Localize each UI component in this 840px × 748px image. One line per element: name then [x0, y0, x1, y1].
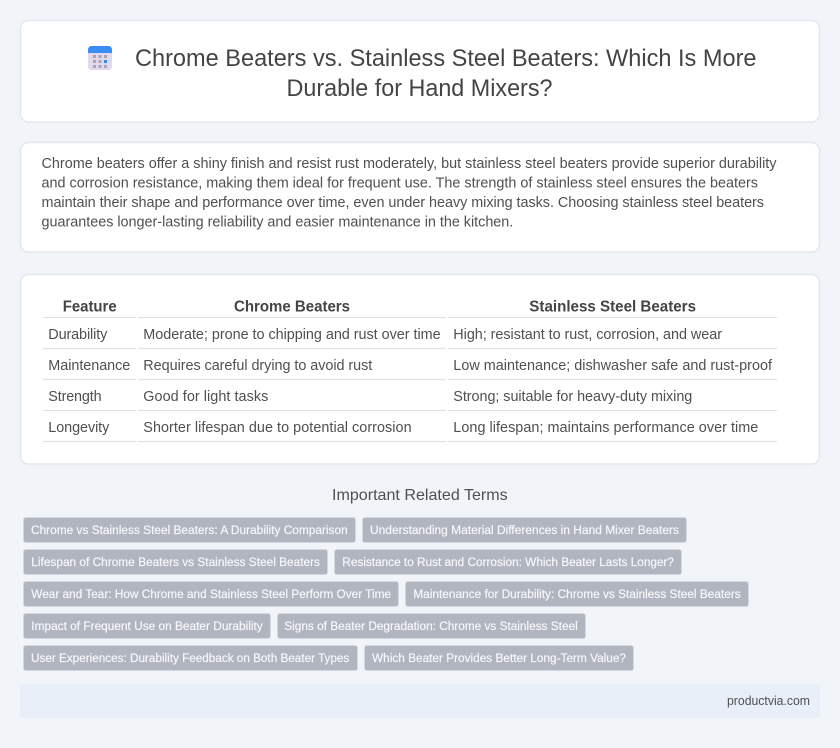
- row: durability: Durability: [48, 327, 108, 343]
- tag row 3: [24, 582, 748, 606]
- row: maintenance: Requires careful drying to avoid rust: [143, 358, 372, 374]
- table header: Chrome Beaters: [234, 298, 350, 316]
- tag row 3: Maintenance for Durability: Chrome vs Stainless Steel Beaters: [413, 587, 741, 601]
- tag row 5: Which Beater Provides Better Long-Term Value?: [372, 651, 626, 665]
- row: longevity: Long lifespan; maintains performance over time: [453, 420, 758, 436]
- panel: header: [20, 20, 820, 122]
- icon: calendar: [88, 46, 112, 70]
- row: maintenance: [48, 358, 773, 374]
- tag row 1: Chrome vs Stainless Steel Beaters: A Durability Comparison: [31, 523, 348, 537]
- text block: summary: Chrome beaters offer a shiny finish and resist rust moderately, but stainless steel beaters provide superior durability: [42, 156, 777, 172]
- heading: related terms: Important Related Terms: [332, 487, 508, 504]
- related term tags: [24, 518, 748, 670]
- text block: summary: [42, 156, 777, 230]
- row: strength: [48, 389, 692, 405]
- row: maintenance: Maintenance: [48, 358, 130, 374]
- row: durability: High; resistant to rust, corrosion, and wear: [453, 327, 722, 343]
- tag row 2: Resistance to Rust and Corrosion: Which Beater Lasts Longer?: [342, 555, 674, 569]
- tag row 4: [24, 614, 586, 638]
- row: longevity: [48, 420, 758, 436]
- tag row 1: Understanding Material Differences in Hand Mixer Beaters: [370, 523, 679, 537]
- title: [135, 45, 756, 102]
- panel: comparison table: [20, 274, 820, 464]
- tag row 3: Wear and Tear: How Chrome and Stainless Steel Perform Over Time: [31, 587, 391, 601]
- text block: summary: maintain their shape and performance over time, even under heavy mixing tasks. Choosing stainless steel beaters: [42, 195, 764, 211]
- table header: [63, 298, 696, 316]
- tag row 4: Impact of Frequent Use on Beater Durability: [31, 619, 264, 633]
- tag row 1: [24, 518, 686, 542]
- row: durability: Moderate; prone to chipping and rust over time: [143, 327, 441, 343]
- table header: Stainless Steel Beaters: [529, 298, 696, 316]
- row: strength: Strong; suitable for heavy-duty mixing: [453, 389, 692, 405]
- panel: summary paragraph: [20, 142, 820, 252]
- text block: summary: guarantees longer-lasting reliability and easier maintenance in the kitchen.: [42, 214, 513, 230]
- row: maintenance: Low maintenance; dishwasher safe and rust-proof: [453, 358, 773, 374]
- footer: productvia.com: [727, 693, 810, 708]
- tag row 5: [24, 646, 634, 670]
- row: strength: Good for light tasks: [143, 389, 268, 405]
- footer: [20, 684, 820, 718]
- row: durability: [48, 327, 722, 343]
- text block: summary: and corrosion resistance, making them ideal for frequent use. The strength of stainless steel ensures the beaters: [42, 176, 758, 192]
- table header: Feature: [63, 298, 117, 316]
- row: strength: Strength: [48, 389, 102, 405]
- row: longevity: Shorter lifespan due to potential corrosion: [143, 420, 412, 436]
- row: longevity: Longevity: [48, 420, 110, 436]
- tag row 4: Signs of Beater Degradation: Chrome vs Stainless Steel: [284, 619, 578, 633]
- tag row 2: Lifespan of Chrome Beaters vs Stainless Steel Beaters: [31, 555, 320, 569]
- title: Durable for Hand Mixers?: [286, 75, 552, 102]
- tag row 5: User Experiences: Durability Feedback on Both Beater Types: [31, 651, 349, 665]
- tag row 2: [24, 550, 682, 574]
- title: Chrome Beaters vs. Stainless Steel Beaters: Which Is More: [135, 45, 756, 72]
